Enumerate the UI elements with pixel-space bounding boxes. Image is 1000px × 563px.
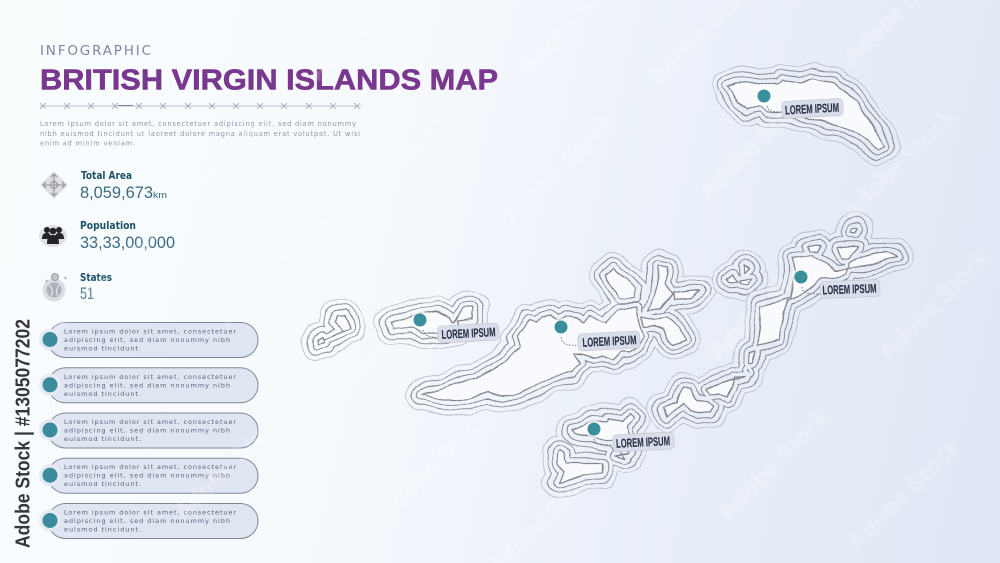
stat: total area: km [153, 190, 167, 201]
icon: area arrows [40, 171, 68, 199]
map: islands with contour rings [317, 78, 897, 483]
island: north-east long island [727, 78, 885, 149]
stat: total area: 8,059,673 [80, 183, 153, 202]
list item 5: euismod tincidunt. [64, 526, 141, 534]
watermark pattern: Adobe Stock [358, 83, 482, 206]
list item 3 [39, 413, 258, 448]
list item 1 [39, 322, 258, 358]
watermark pattern: Adobe Stock [843, 433, 967, 556]
island: western island [390, 307, 473, 333]
island: southern group [558, 413, 635, 483]
icon: globe with pin [42, 274, 67, 302]
stat: total area [80, 170, 167, 202]
watermark pattern: Adobe Stock [373, 403, 497, 526]
list item 2: adipiscing elit, sed diam nonummy nibh [64, 381, 230, 389]
intro paragraph: Lorem ipsum dolor sit amet, consectetuer adipiscing elit, sed diam nonummy [40, 120, 356, 128]
marker and label: south: LOREM IPSUM [616, 434, 670, 451]
stat: total area: Total Area [81, 170, 132, 182]
list item 2: euismod tincidunt. [64, 390, 141, 398]
list item 3: adipiscing elit, sed diam nonummy nibh [64, 426, 230, 434]
list item 5: Lorem ipsum dolor sit amet, consectetuer [64, 508, 236, 516]
icon: people [39, 225, 67, 247]
list item 4: euismod tincidunt. [64, 480, 141, 488]
stat: states [80, 272, 112, 303]
eyebrow: infographic: INFOGRAPHIC [40, 43, 151, 59]
watermark pattern: Adobe Stock [328, 278, 452, 401]
marker and label: south [585, 420, 674, 452]
list item 1: Lorem ipsum dolor sit amet, consectetuer [64, 328, 236, 336]
list item 1: adipiscing elit, sed diam nonummy nibh [64, 336, 230, 344]
stat: population: 33,33,00,000 [80, 233, 175, 252]
watermark pattern: Adobe Stock [43, 218, 167, 341]
intro paragraph: nibh euismod tincidunt ut laoreet dolore magna aliquam erat volutpat. Ut wisi [40, 130, 360, 138]
marker and label: west: LOREM IPSUM [441, 325, 496, 342]
list item 1: euismod tincidunt. [64, 344, 141, 352]
stat: population: Population [80, 220, 136, 232]
stat: states: States [80, 272, 112, 284]
list item 2: Lorem ipsum dolor sit amet, consectetuer [64, 373, 236, 381]
island: small trio cay [727, 265, 753, 285]
marker and label: central: LOREM IPSUM [582, 333, 637, 350]
island: western cay [317, 315, 350, 345]
title: BRITISH VIRGIN ISLANDS MAP [40, 64, 498, 96]
watermark pattern: Adobe Stock [523, 273, 647, 396]
list item 4: Lorem ipsum dolor sit amet, consectetuer [64, 463, 236, 471]
stat: states: 51 [80, 284, 94, 303]
intro paragraph [40, 120, 360, 148]
list item 5: adipiscing elit, sed diam nonummy nibh [64, 517, 230, 525]
list item 4 [39, 458, 258, 493]
watermark pattern: Adobe Stock [693, 83, 817, 206]
watermark pattern: Adobe Stock [213, 208, 337, 331]
stat: population [80, 220, 175, 252]
divider with crosses [40, 103, 361, 109]
list item 2 [39, 368, 258, 403]
island: central main island [422, 265, 700, 400]
vertical stock id text: Adobe Stock | #1305077202 [12, 319, 34, 548]
watermark pattern: Adobe Stock [838, 103, 962, 226]
watermark pattern: Adobe Stock [168, 403, 292, 526]
list item 5 [39, 504, 258, 538]
marker and label: west [411, 311, 499, 343]
watermark pattern: Adobe Stock [498, 108, 622, 231]
island: eastern chain [662, 228, 897, 417]
watermark pattern: Adobe Stock [703, 243, 827, 366]
marker and label: north-east: LOREM IPSUM [785, 101, 839, 117]
list item 4: adipiscing elit, sed diam nonummy nibh [64, 472, 230, 480]
marker and label: north-east [755, 87, 843, 119]
list item 3: Lorem ipsum dolor sit amet, consectetuer [64, 418, 236, 426]
list item 3: euismod tincidunt. [64, 435, 141, 443]
marker and label: east: LOREM IPSUM [822, 282, 877, 297]
watermark pattern: Adobe Stock [713, 403, 837, 526]
marker and label: east [792, 268, 880, 299]
watermark pattern: Adobe Stock [158, 103, 282, 226]
marker and label: central [552, 318, 640, 351]
intro paragraph: enim ad minim veniam. [40, 140, 135, 148]
watermark pattern: Adobe Stock [873, 243, 997, 366]
